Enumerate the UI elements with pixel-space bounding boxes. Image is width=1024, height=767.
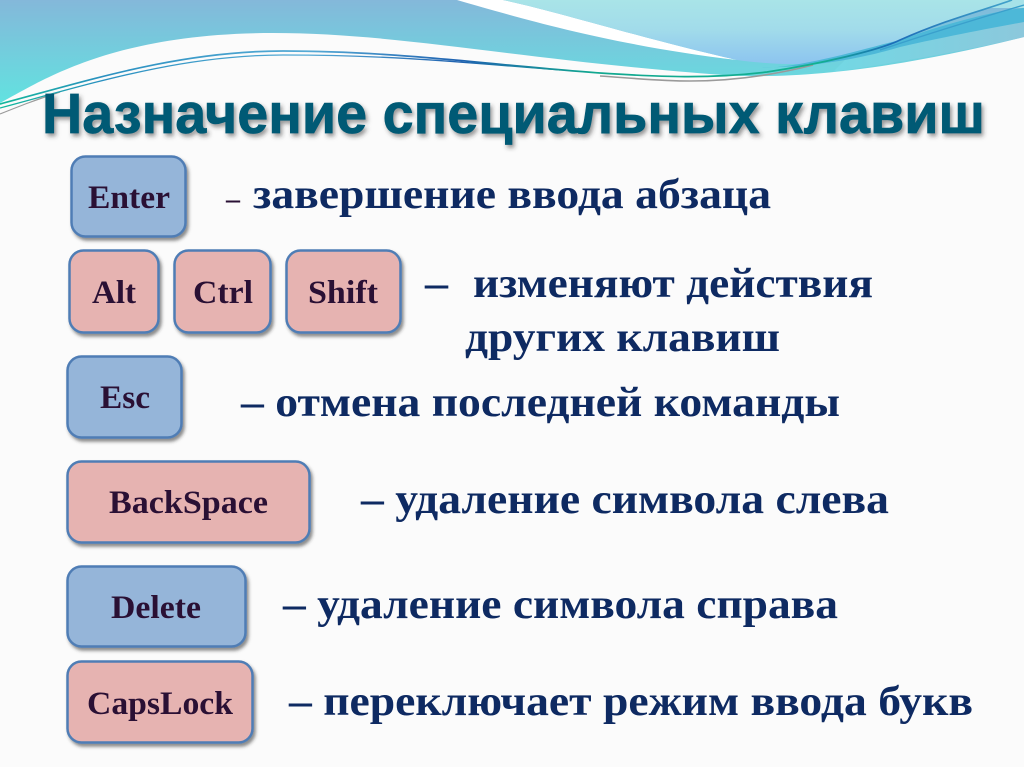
key: Alt <box>70 250 158 332</box>
key: Alt: Alt <box>92 275 136 311</box>
key: CapsLock: CapsLock <box>87 686 234 722</box>
row: Alt Ctrl Shift <box>70 250 873 361</box>
key: Shift: Shift <box>308 275 378 311</box>
key: Enter: Enter <box>88 180 170 216</box>
key: CapsLock <box>68 662 252 742</box>
row: Delete <box>68 566 838 646</box>
description: CapsLock: – переключает режим ввода букв <box>288 679 973 725</box>
row: Esc <box>68 356 840 438</box>
row: BackSpace <box>68 462 889 542</box>
header wave <box>0 0 1024 114</box>
description: Delete: – удаление символа справа <box>282 582 838 628</box>
key: Shift <box>286 250 400 332</box>
description: Enter: – <box>225 184 241 215</box>
key: Esc <box>68 356 182 438</box>
description: Enter: завершение ввода абзаца <box>253 172 771 218</box>
key: BackSpace: BackSpace <box>109 485 268 521</box>
description: modifier keys <box>424 261 873 361</box>
row: CapsLock <box>68 662 973 742</box>
key: Ctrl <box>174 250 270 332</box>
key: Delete <box>68 566 246 646</box>
description: BackSpace: – удаление символа слева <box>360 477 889 523</box>
key: Ctrl: Ctrl <box>193 275 253 311</box>
key: Enter <box>72 156 186 236</box>
description: Esc: – отмена последней команды <box>240 380 840 426</box>
description: modifier keys: – <box>424 261 449 307</box>
title: Назначение специальных клавиш <box>42 82 985 146</box>
description: modifier keys: изменяют действия <box>473 261 873 307</box>
key: BackSpace <box>68 462 310 542</box>
key: Esc: Esc <box>100 380 150 416</box>
key: Delete: Delete <box>111 590 201 626</box>
description: modifier keys: других клавиш <box>465 315 780 361</box>
row: Enter <box>72 156 771 236</box>
